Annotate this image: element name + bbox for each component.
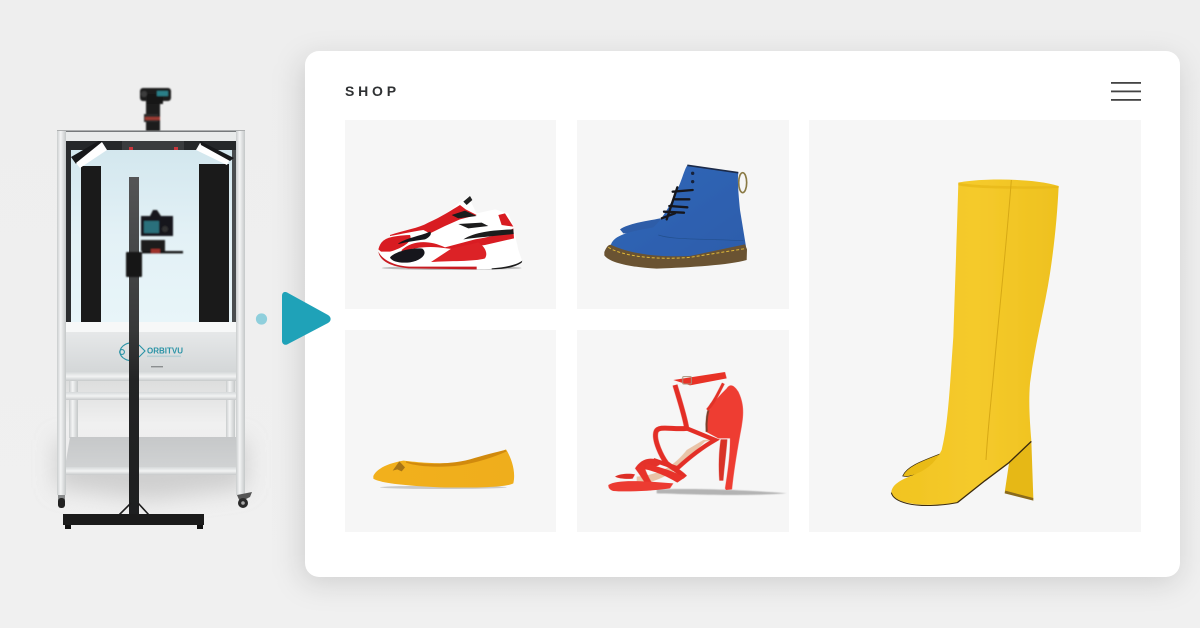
icon: red high-heel sandal: [608, 372, 787, 495]
icon: tall yellow boot: [891, 180, 1059, 506]
studio lights: [71, 139, 234, 168]
frame rails: [57, 130, 245, 475]
play arrow: [282, 292, 331, 345]
icon: yellow ballet flat: [373, 449, 514, 489]
machine base panel: [65, 332, 236, 372]
product tile: red sandal: [577, 330, 789, 532]
product tile: sneaker: [345, 120, 556, 309]
under-shelf area: [66, 380, 236, 468]
frame posts: [57, 131, 245, 495]
top camera: [140, 88, 171, 131]
lower shelf: [65, 437, 236, 467]
logo text: ORBITVU: [147, 346, 183, 356]
photography machine: [56, 88, 252, 529]
black side panels: [81, 164, 229, 323]
icon: blue boot: [604, 165, 747, 269]
machine floor shadow: [56, 440, 246, 500]
rear legs: [69, 380, 235, 438]
product tile: yellow flat: [345, 330, 556, 532]
heading: SHOP: [345, 83, 400, 99]
icon: red sneaker: [378, 196, 522, 270]
white turntable shelf: [66, 322, 236, 332]
casters: [58, 492, 252, 508]
product tile: tall yellow boot: [809, 120, 1141, 532]
machine interior: [66, 140, 236, 324]
logo mark: [120, 343, 145, 361]
shop card panel: [305, 51, 1180, 577]
product tile: blue boot: [577, 120, 789, 309]
hamburger menu icon: [1111, 82, 1141, 101]
card shadow: [300, 58, 1180, 584]
camera column stand: [63, 177, 204, 529]
column camera: [126, 210, 183, 277]
connector dot: [256, 313, 267, 325]
